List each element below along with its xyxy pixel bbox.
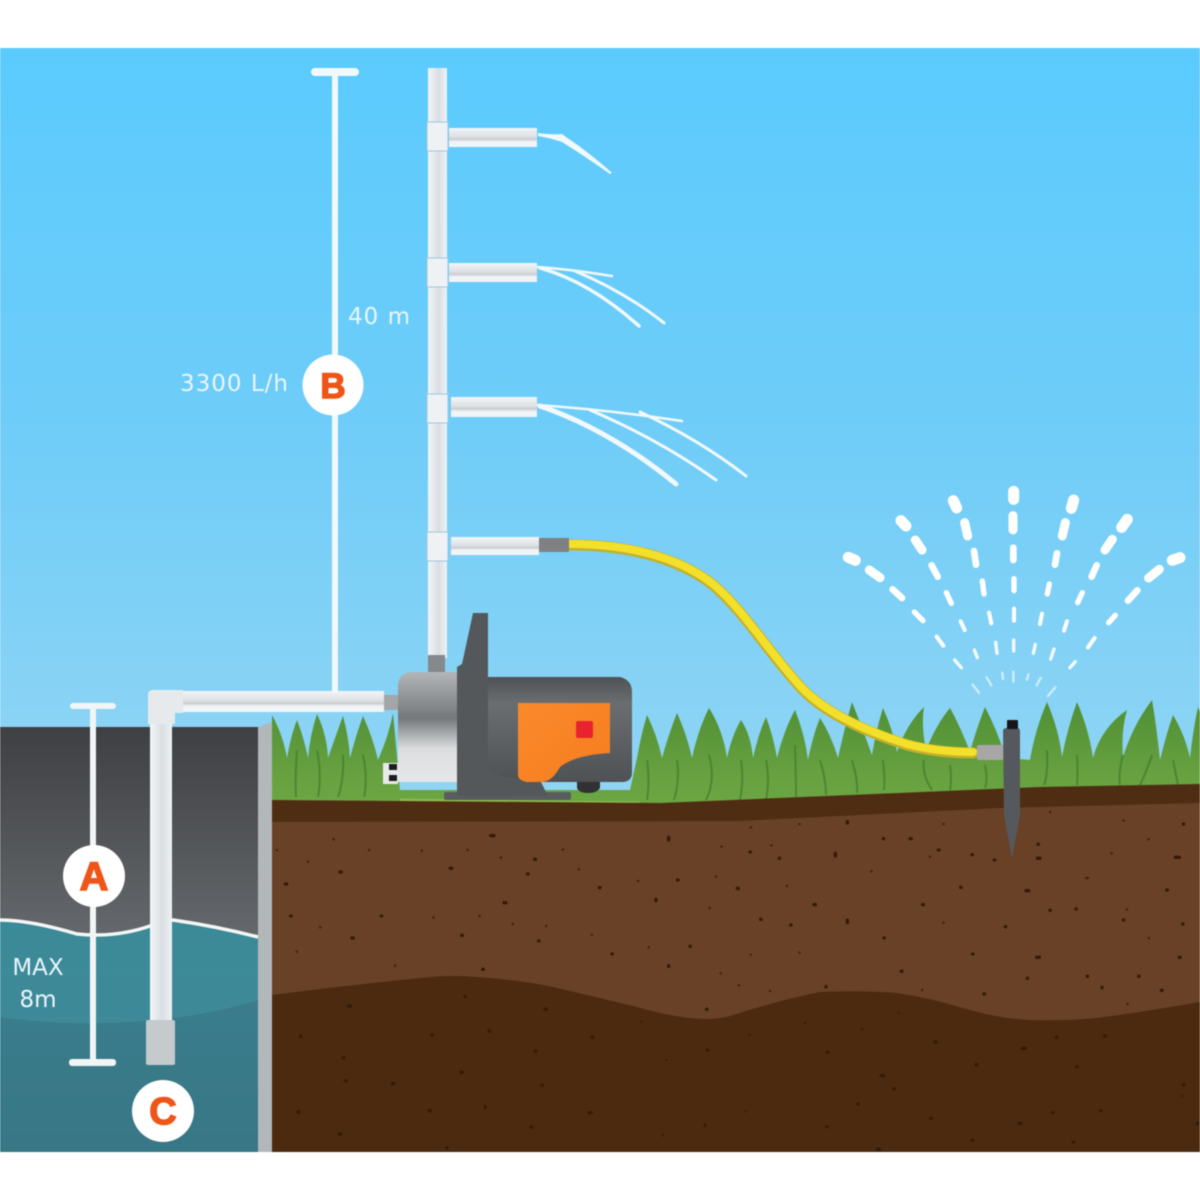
badge C: C xyxy=(149,1091,177,1133)
water surface line xyxy=(0,920,258,937)
well shaft xyxy=(0,727,258,942)
water spray: second outlet xyxy=(538,267,664,326)
label: 40 m: 40 m xyxy=(348,304,411,330)
dimension B: delivery height xyxy=(302,68,364,692)
sprinkler nozzle xyxy=(1007,720,1018,729)
hose coupling xyxy=(539,538,569,552)
water spray: third outlet xyxy=(537,405,746,484)
sprinkler stake xyxy=(1003,728,1020,858)
foot valve xyxy=(146,1020,175,1065)
A line xyxy=(90,706,96,1063)
label: MAX 8m: MAX xyxy=(12,955,64,981)
well wall xyxy=(258,722,272,1152)
orange panel xyxy=(518,703,610,782)
deep water layer xyxy=(0,1000,258,1152)
sprinkler xyxy=(977,720,1020,858)
badge A: A xyxy=(80,855,108,899)
pump xyxy=(383,613,632,800)
red indicator xyxy=(576,721,593,738)
base plate xyxy=(444,792,571,800)
pipe joints xyxy=(427,122,448,561)
motor housing xyxy=(488,677,632,782)
vertical test pipe with outlets xyxy=(427,68,569,658)
vertical pipe xyxy=(150,722,172,1020)
suction pipe xyxy=(146,690,384,1065)
soil xyxy=(272,784,1200,1152)
label: 3300 L/h: 3300 L/h xyxy=(180,371,289,397)
badge A xyxy=(63,845,125,907)
badge B: B xyxy=(320,367,346,406)
sky background xyxy=(0,48,1200,808)
inlet nipple xyxy=(384,695,399,710)
badge B xyxy=(302,354,364,416)
sprinkler connector xyxy=(977,745,1004,760)
label: MAX 8m xyxy=(12,955,64,1013)
outlet nipple top xyxy=(428,655,445,673)
soil specks xyxy=(277,836,738,1148)
stainless pump head xyxy=(398,672,458,782)
well water xyxy=(0,920,258,1152)
elbow xyxy=(148,690,183,724)
label: MAX 8m: 8m xyxy=(19,987,57,1013)
bracket xyxy=(457,613,548,796)
riser pipe xyxy=(428,68,447,658)
hose clip xyxy=(383,763,398,784)
water spray: top outlet xyxy=(538,133,612,174)
B top bar xyxy=(311,68,359,76)
hose to sprinkler xyxy=(570,544,973,753)
horizontal pipe xyxy=(178,691,384,712)
A top bar xyxy=(70,703,116,709)
B line xyxy=(332,72,338,692)
badge C xyxy=(132,1080,194,1142)
motor foot xyxy=(577,782,600,793)
grass xyxy=(272,700,1200,812)
dimension A: suction height xyxy=(63,703,125,1066)
water spray: sprinkler fan xyxy=(848,491,1180,696)
outlet stubs xyxy=(449,128,539,555)
A bottom bar xyxy=(69,1059,116,1066)
